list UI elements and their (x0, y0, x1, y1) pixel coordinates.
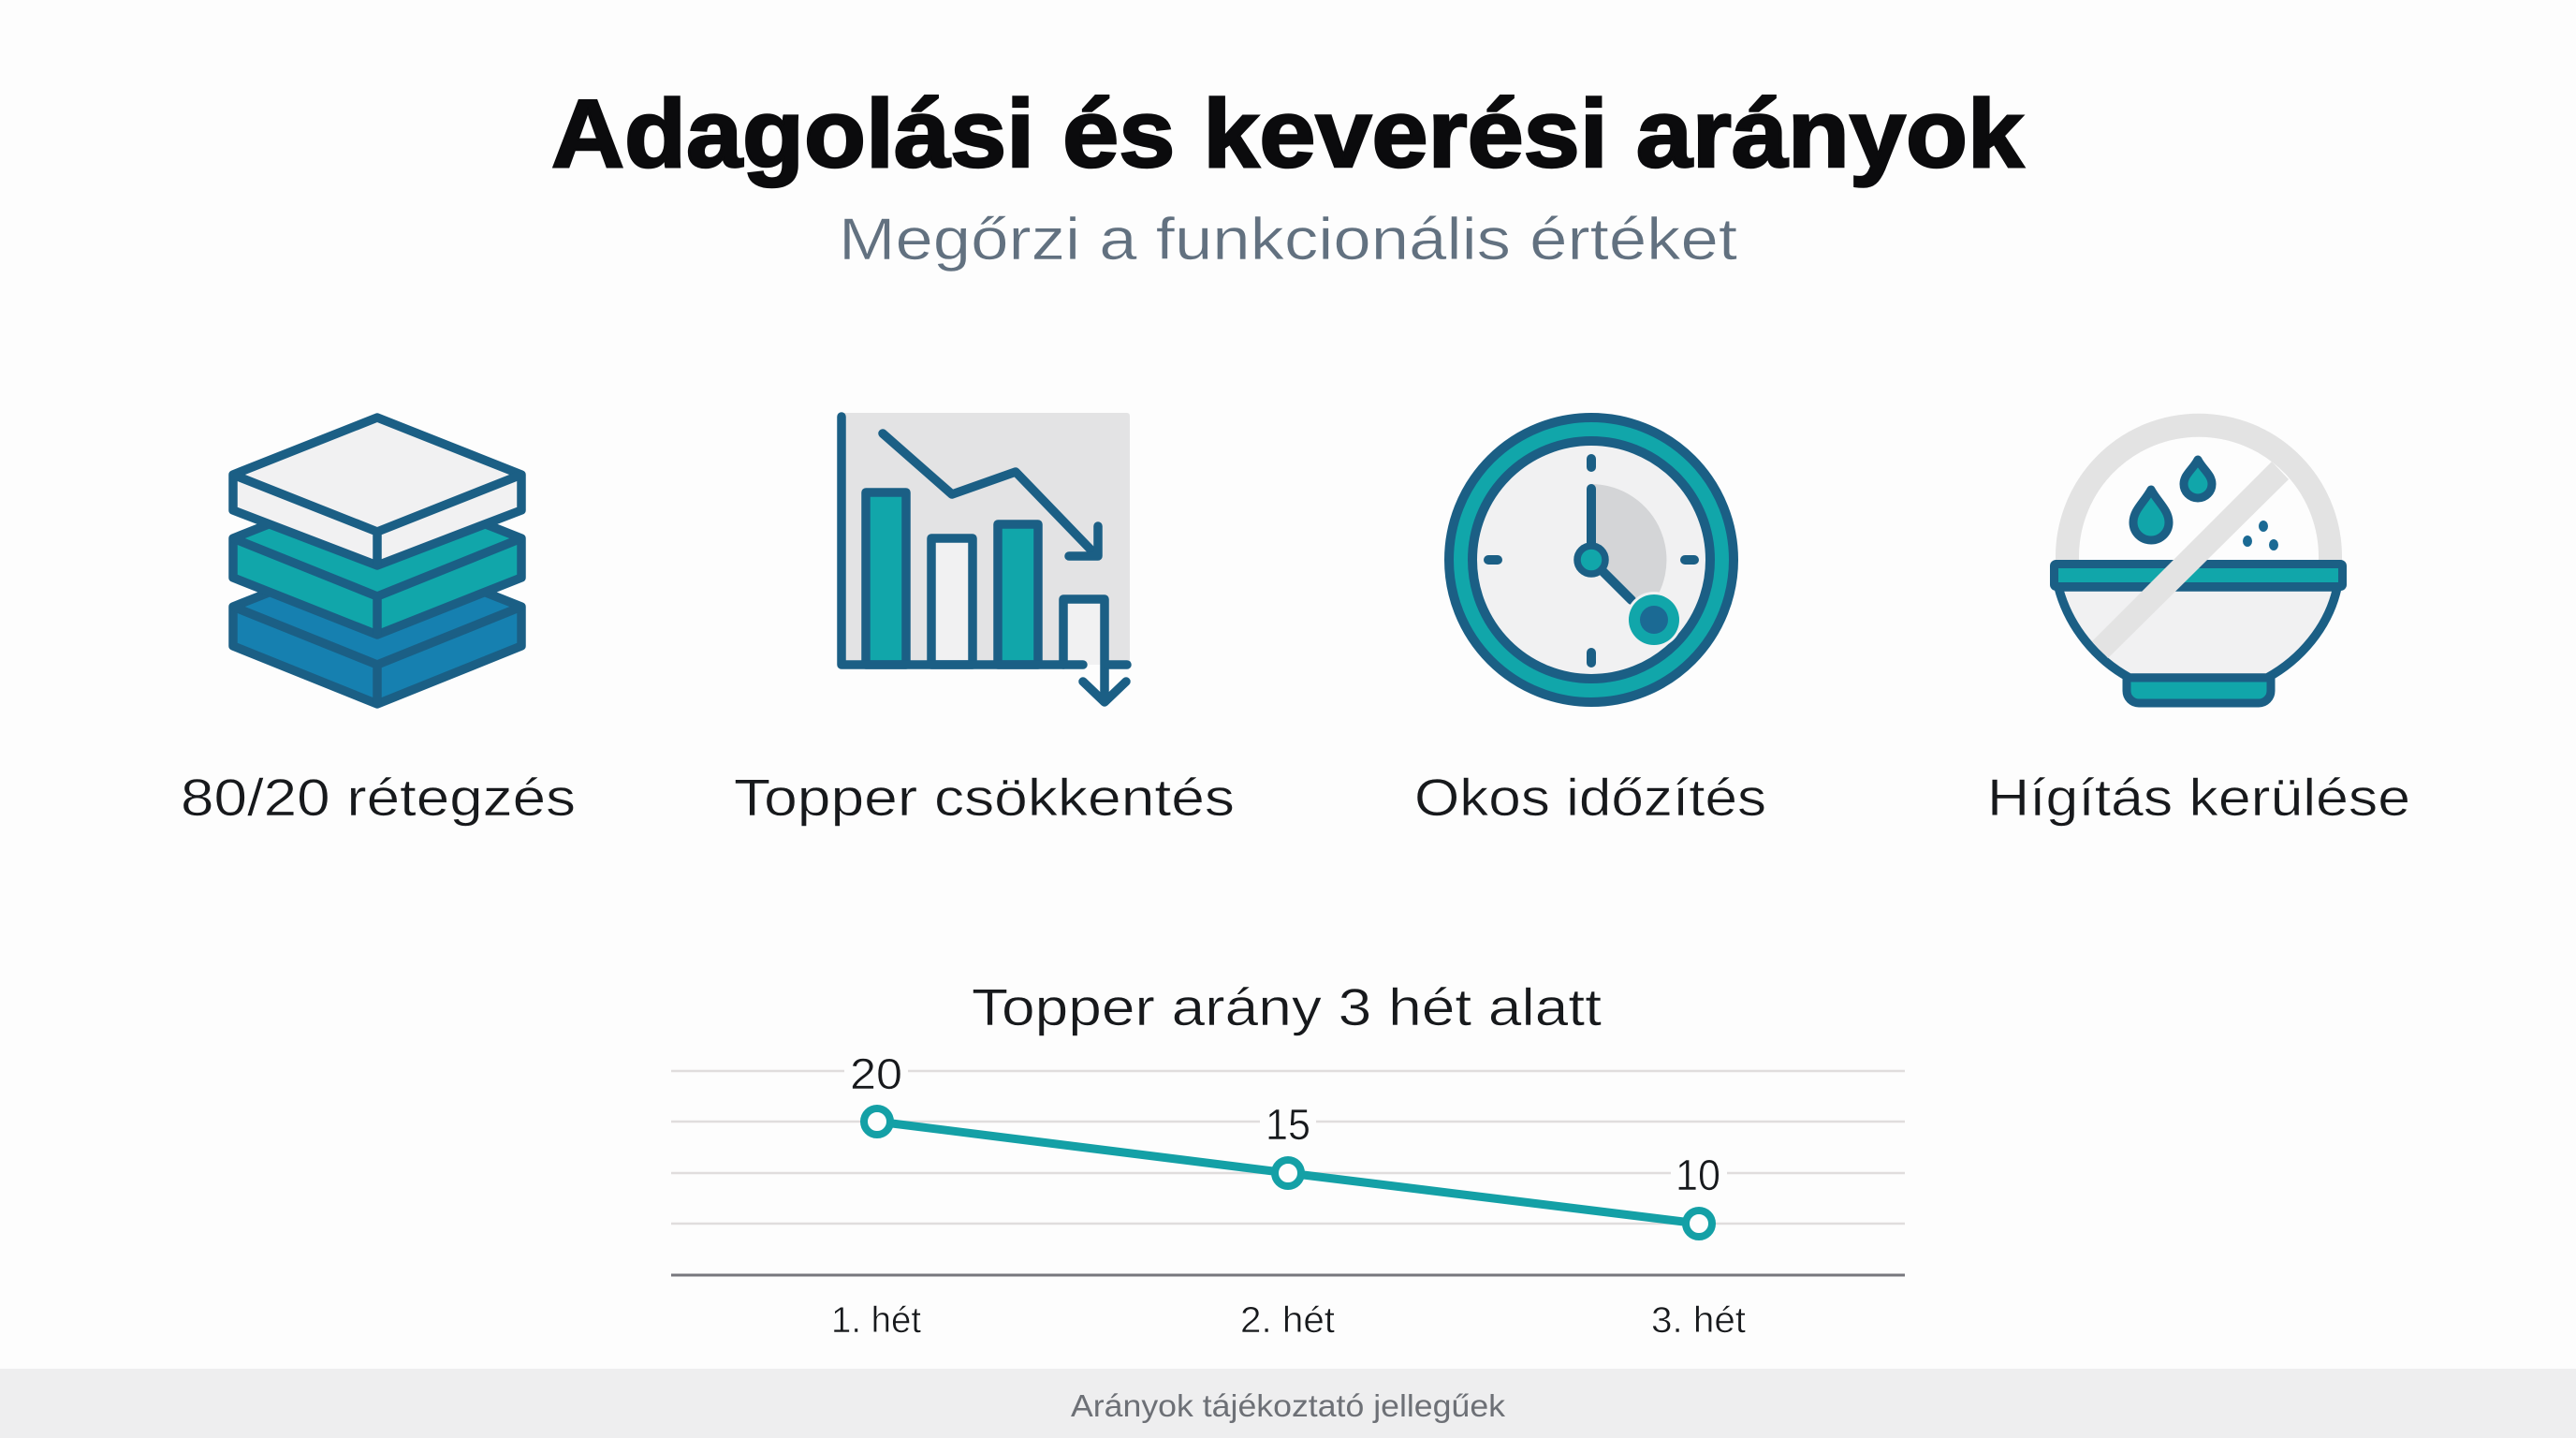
chart baseline axis (671, 1273, 1905, 1277)
x-axis labels: 1. hét (831, 1300, 921, 1341)
icon: bowl with prohibition sign (2054, 425, 2342, 703)
value labels: 20 (850, 1049, 902, 1098)
icon: stacked layers (233, 418, 521, 704)
data line with markers (864, 1108, 1712, 1237)
subtitle: Megőrzi a funkcionális értéket (839, 207, 1738, 272)
panel: topper reduction (734, 413, 1235, 827)
x-axis labels (831, 1300, 1746, 1341)
label: avoid dilution: Hígítás kerülése (1987, 768, 2410, 827)
label: topper reduction: Topper csökkentés (734, 768, 1235, 827)
chart title: Topper arány 3 hét alatt (972, 977, 1602, 1036)
value labels: 10 (1676, 1151, 1720, 1199)
x-axis labels: 3. hét (1651, 1300, 1746, 1341)
title: Adagolási és keverési arányok (551, 80, 2025, 187)
panel: line chart (671, 977, 1905, 1341)
x-axis labels: 2. hét (1240, 1300, 1335, 1341)
icon: clock (1449, 418, 1734, 702)
label: 80/20 layering: 80/20 rétegzés (181, 768, 576, 827)
panel: avoid dilution (1987, 425, 2410, 827)
value labels: 15 (1266, 1100, 1310, 1149)
panel: smart timing (1414, 418, 1766, 827)
value labels (844, 1049, 1727, 1199)
icon: declining bar chart (842, 413, 1130, 702)
footer note: Arányok tájékoztató jellegűek (1071, 1388, 1506, 1423)
chart gridlines (671, 1071, 1905, 1224)
panel: 80/20 layering (181, 418, 576, 827)
footer band (0, 1369, 2576, 1438)
label: smart timing: Okos időzítés (1414, 768, 1766, 827)
